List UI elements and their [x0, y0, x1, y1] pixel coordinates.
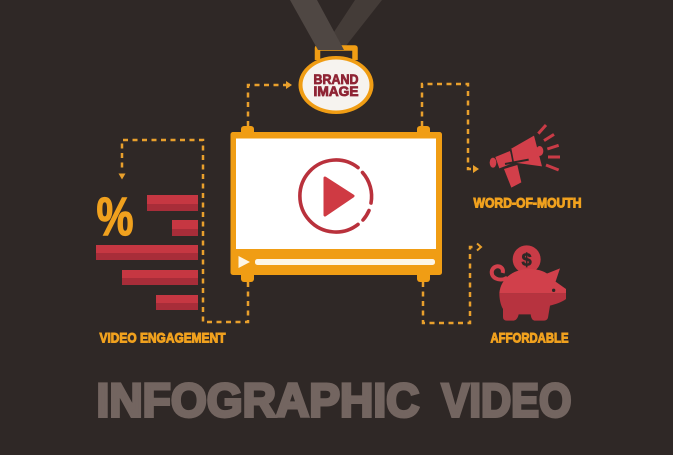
icon: piggy bank — [492, 245, 566, 321]
play ring — [300, 160, 372, 232]
percent icon: % — [96, 187, 134, 247]
dollar sign: $ — [522, 250, 532, 270]
medal label: BRAND — [314, 72, 359, 87]
connector: video to affordable — [423, 244, 481, 323]
bar chart — [96, 195, 198, 310]
progress bar — [255, 259, 435, 265]
medal: brand image — [290, 0, 382, 114]
pig eye — [552, 289, 555, 292]
label: affordable: AFFORDABLE — [490, 330, 568, 346]
connector: video to word of mouth — [422, 84, 479, 173]
video player — [230, 126, 442, 282]
coin — [513, 245, 541, 273]
pig lower body — [499, 293, 566, 321]
medal face — [302, 60, 370, 110]
play triangle — [325, 178, 353, 215]
title: INFOGRAPHIC — [96, 374, 420, 426]
player screen — [236, 138, 436, 249]
icon: megaphone — [490, 125, 560, 188]
title — [96, 374, 572, 426]
player frame — [230, 132, 442, 275]
player tabs — [241, 126, 430, 282]
connector: video to brand image — [248, 81, 292, 126]
pig body — [492, 266, 566, 293]
medal hanger — [318, 48, 355, 60]
label: video engagement: VIDEO ENGAGEMENT — [100, 330, 226, 346]
ribbon: right strap — [330, 0, 382, 47]
medal body — [298, 56, 374, 114]
ribbon: left strap — [290, 0, 344, 50]
medal label — [314, 72, 359, 99]
connector: video to engagement — [118, 140, 248, 322]
small play icon — [238, 256, 250, 268]
label: word of mouth: WORD-OF-MOUTH — [474, 194, 582, 210]
title: VIDEO — [442, 374, 572, 426]
medal label: IMAGE — [314, 84, 358, 99]
